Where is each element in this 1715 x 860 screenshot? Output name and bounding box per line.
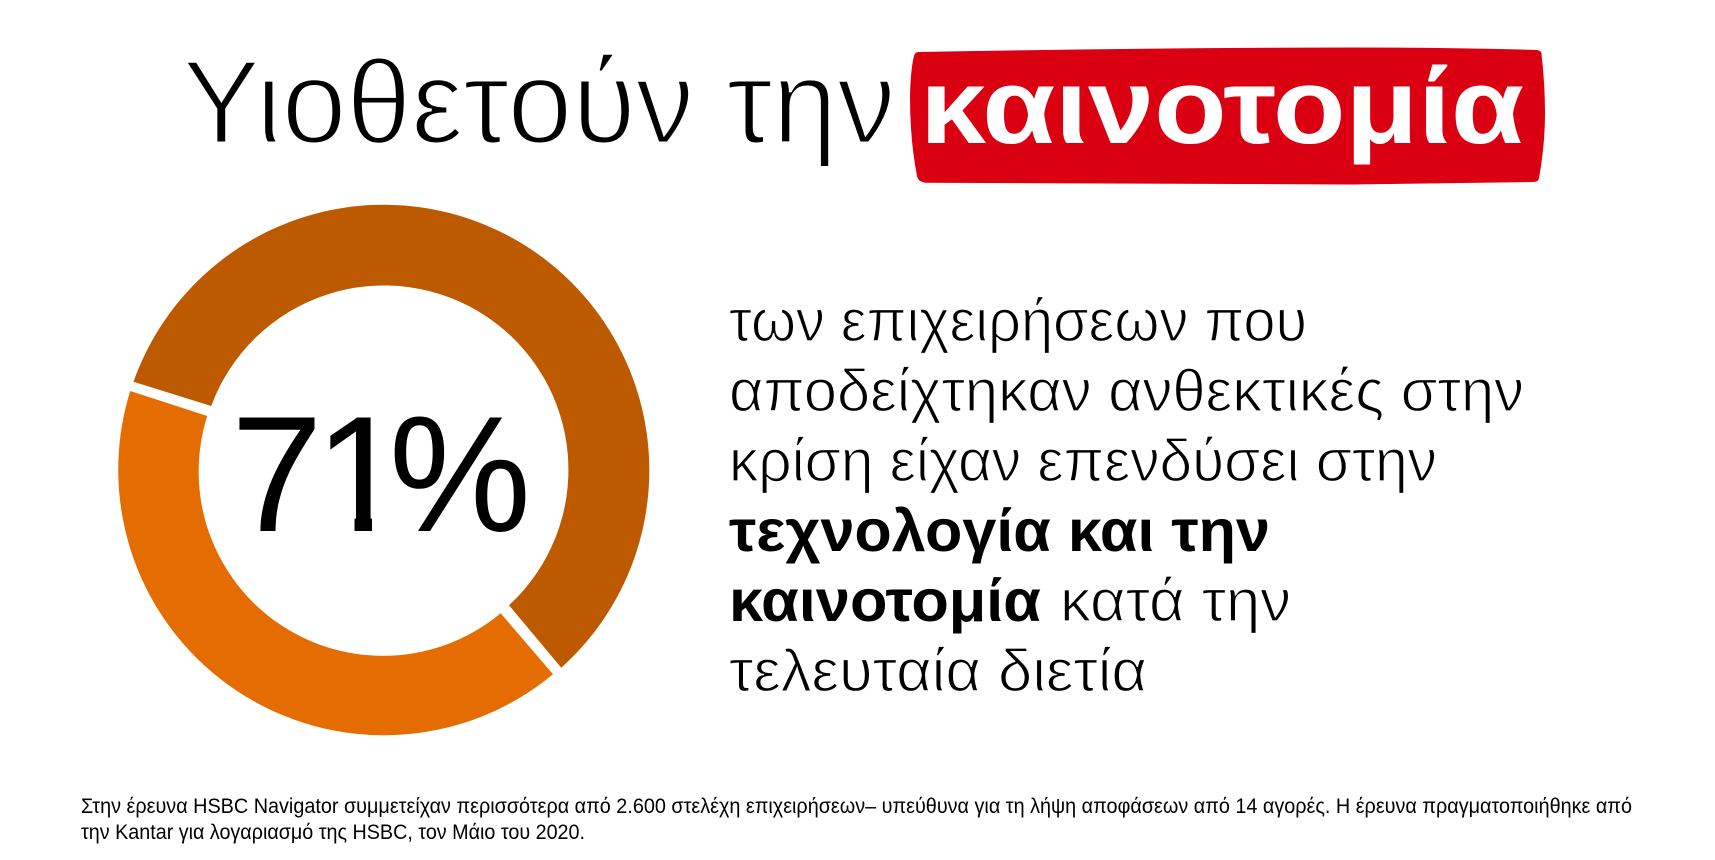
donut segment: remaining share — [134, 205, 649, 668]
donut chart: 71% — [118, 205, 649, 735]
badge word: καινοτομία — [920, 46, 1524, 166]
percent sign: % — [389, 382, 531, 566]
digits 71: 71 — [231, 382, 406, 566]
badge shape — [910, 48, 1545, 184]
title text: Υιοθετούν την — [182, 36, 896, 169]
donut value — [231, 382, 531, 566]
title — [182, 36, 1545, 184]
line 2: αποδείχτηκαν ανθεκτικές στην — [729, 358, 1524, 424]
line 4, bold: τεχνολογία και την — [729, 498, 1270, 564]
line 3: κρίση είχαν επενδύσει στην — [729, 428, 1437, 494]
footnote — [81, 795, 1632, 844]
red badge: καινοτομία — [910, 46, 1545, 184]
line 1: των επιχειρήσεων που — [729, 288, 1307, 354]
description text — [729, 288, 1524, 704]
footnote line 2: την Kantar για λογαριασμό της HSBC, τον Μάιο του 2020. — [81, 821, 585, 844]
footnote line 1: Στην έρευνα HSBC Navigator συμμετείχαν περισσότερα από 2.600 στελέχη επιχειρήσεων– υπεύθυνα για τη λήψη αποφάσεων από 14 αγορές. Η έρευνα πραγματοποιήθηκε από — [81, 795, 1632, 818]
line 5, regular part: κατά την — [1060, 568, 1291, 634]
donut segment: 71 percent — [118, 391, 553, 735]
mask for the foot of the digit 1 — [318, 517, 402, 533]
line 6: τελευταία διετία — [729, 638, 1147, 704]
line 5, bold part: καινοτομία — [729, 568, 1041, 634]
